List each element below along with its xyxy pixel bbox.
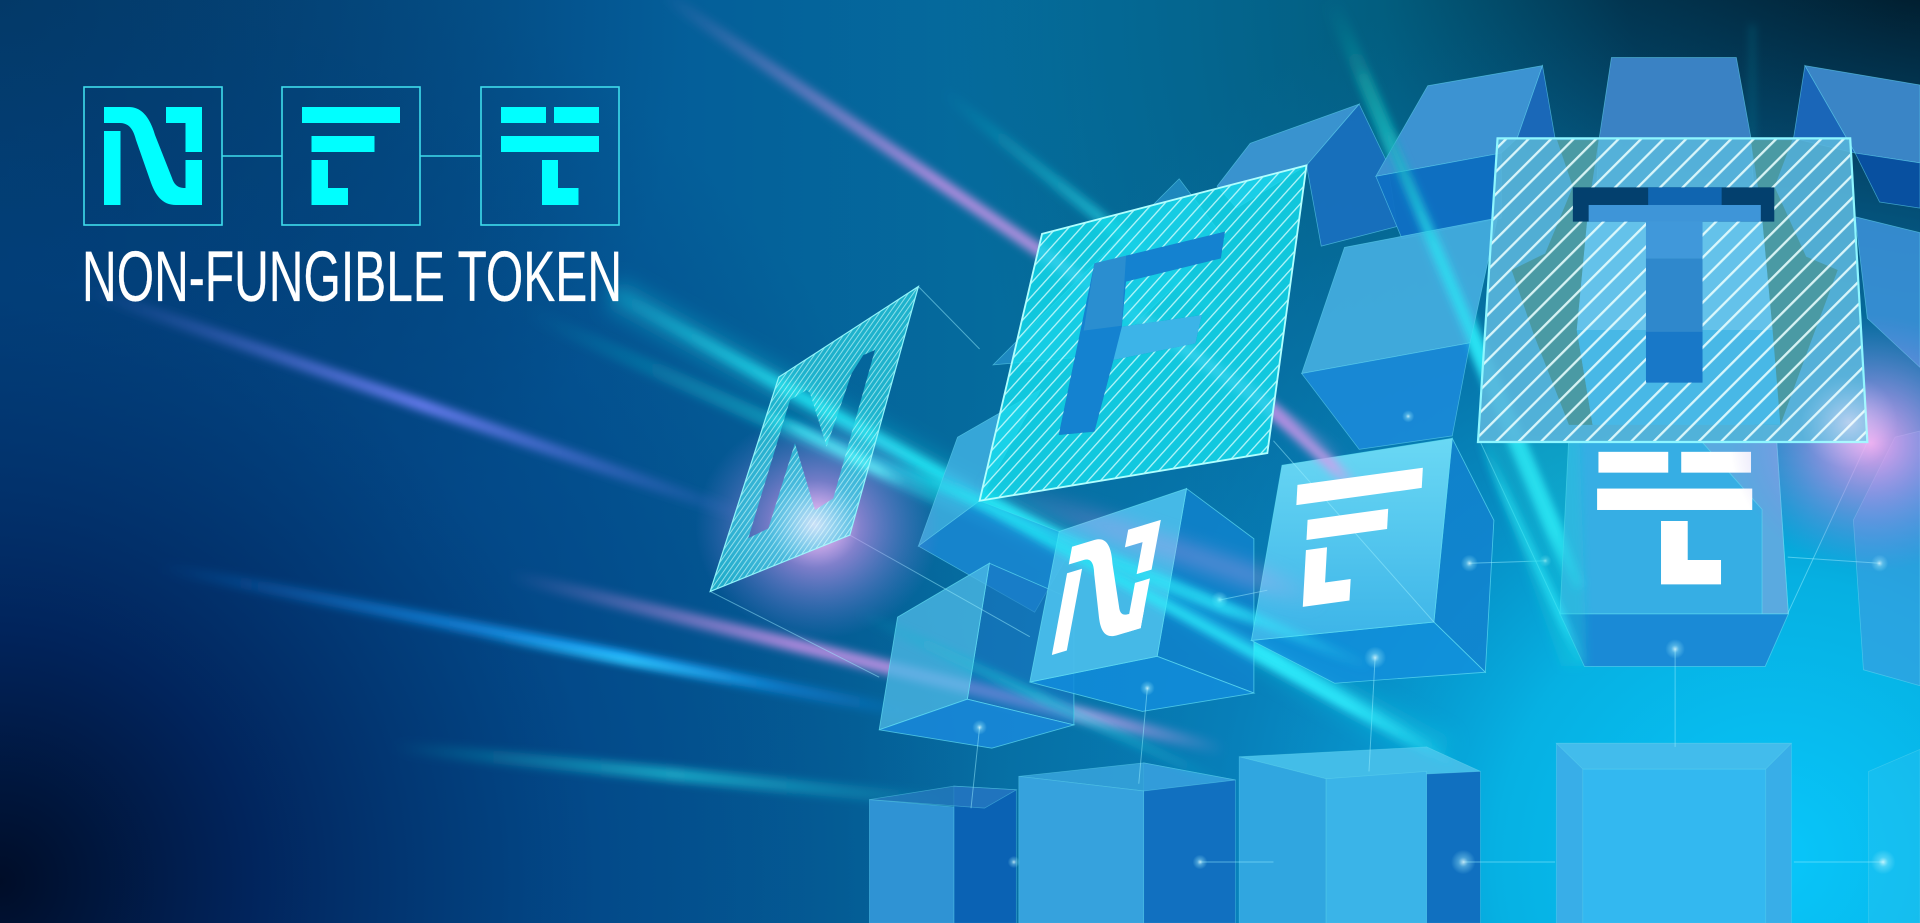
light rays behind cubes xyxy=(86,0,1753,802)
connector xyxy=(222,155,282,157)
white T glyph on cube xyxy=(1597,452,1752,584)
cube: behind F panel xyxy=(918,179,1224,612)
cube: T letter xyxy=(1560,442,1788,667)
panel: hatched N xyxy=(710,287,918,591)
white N glyph on cube xyxy=(1052,520,1161,655)
bottom columns xyxy=(869,743,1920,923)
cube: back left xyxy=(1217,104,1397,246)
cube: F letter xyxy=(1251,438,1494,683)
panel: hatched T xyxy=(1478,138,1867,442)
column 3 xyxy=(1239,747,1480,923)
T stem xyxy=(1646,222,1703,383)
cube: N letter xyxy=(1030,489,1254,711)
logo: NFT boxes xyxy=(84,87,619,225)
box F xyxy=(282,87,420,225)
title: NON-FUNGIBLE TOKEN xyxy=(82,237,622,317)
box T xyxy=(481,87,619,225)
column 1 xyxy=(869,786,1016,923)
F glyph xyxy=(1059,232,1225,435)
cube: back right xyxy=(1794,66,1920,367)
cube: back centre xyxy=(1587,58,1763,367)
cube: back second xyxy=(1376,66,1555,239)
light rays over cubes xyxy=(765,73,1587,784)
back row cubes xyxy=(918,58,1920,686)
T top bar xyxy=(1573,187,1774,222)
cube: middle large xyxy=(1302,218,1498,449)
cube: lower left xyxy=(879,563,1074,748)
box N xyxy=(84,87,222,225)
column 2 xyxy=(1019,763,1236,923)
column 4 xyxy=(1556,743,1791,923)
glow overlay on panels xyxy=(765,376,1898,568)
hatch lines xyxy=(1478,138,1867,442)
panel: hatched F xyxy=(980,165,1307,501)
connector xyxy=(420,155,481,157)
node dots and links xyxy=(710,287,1896,874)
column 5 xyxy=(1869,749,1920,923)
cube edge lines xyxy=(710,287,1867,677)
white F glyph on cube xyxy=(1291,468,1423,609)
pink glows xyxy=(696,315,1920,639)
cube: far right xyxy=(1853,431,1920,686)
gaps between cubes seen through panel xyxy=(1512,140,1838,425)
